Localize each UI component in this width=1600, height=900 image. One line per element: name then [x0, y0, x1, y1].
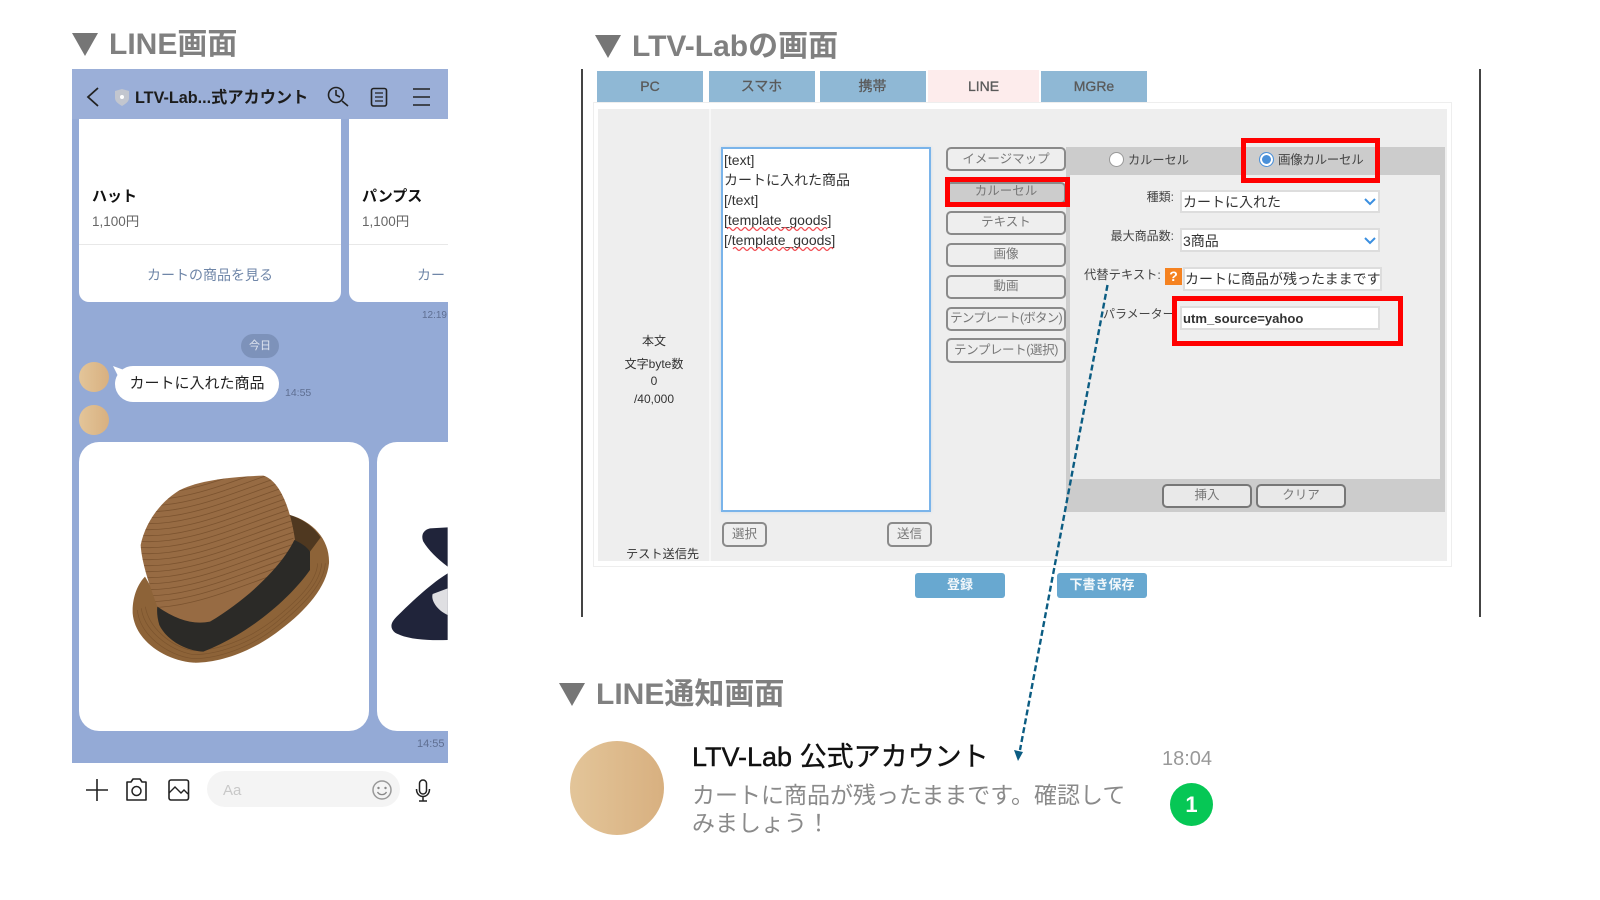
right frame rule — [1479, 69, 1481, 617]
line カートに入れた商品: カートに入れた商品 — [724, 172, 850, 188]
product illustration: hat and shoe — [132, 476, 448, 663]
input 代替テキスト — [1183, 267, 1382, 291]
input パラメーター: utm_source=yahoo — [1183, 311, 1303, 326]
button テキスト: テキスト — [981, 215, 1031, 229]
bubble tail — [113, 366, 122, 375]
input パラメーター — [1180, 306, 1380, 330]
product name: ハット — [92, 188, 137, 205]
radio 画像カルーセル: 画像カルーセル — [1278, 153, 1363, 167]
tab MGRe: MGRe — [1074, 78, 1114, 94]
label 文字byte数: 文字byte数 — [625, 357, 683, 371]
settings inner area — [1070, 175, 1440, 479]
product card: ハット — [79, 119, 341, 302]
icon: orange help: ? — [1169, 268, 1178, 284]
product card: パンプス — [349, 119, 448, 302]
input bar icons — [86, 778, 430, 802]
line [text]: [text] — [724, 152, 754, 168]
tab スマホ — [708, 71, 814, 102]
select 最大商品数 — [1180, 228, 1380, 252]
button 送信 — [887, 522, 932, 547]
tab bar — [597, 70, 1147, 102]
message text area — [721, 147, 931, 512]
select 最大商品数: 3商品 — [1183, 233, 1219, 249]
message bubble: カートに入れた商品 — [129, 375, 264, 392]
avatar 1 — [79, 362, 109, 392]
field label 種類: 種類: — [1147, 190, 1174, 204]
image card: shoe — [377, 442, 448, 731]
panel: LTV-Lab admin screen — [581, 69, 1481, 617]
button 挿入: 挿入 — [1194, 488, 1220, 502]
label 0: 0 — [651, 374, 657, 388]
cart link: カー — [417, 267, 445, 283]
left frame rule — [581, 69, 583, 617]
select 種類: カートに入れた — [1183, 194, 1281, 210]
button 登録 — [915, 573, 1005, 598]
button カルーセル — [946, 182, 1066, 204]
highlight: parameter input — [1172, 296, 1403, 346]
unread badge — [1170, 783, 1213, 826]
message input: Aa — [223, 782, 241, 799]
header icons — [86, 86, 430, 107]
hat crown — [140, 476, 295, 622]
notification time: 18:04 — [1162, 748, 1212, 770]
button 選択: 選択 — [732, 527, 757, 541]
shoe — [391, 527, 448, 640]
input 代替テキスト: カートに商品が残ったままです — [1185, 271, 1381, 287]
heading: LTV-Labの画面: LTV-Labの画面 — [632, 30, 838, 63]
editor panel — [593, 102, 1452, 567]
heading: LINE画面: LINE画面 — [109, 28, 237, 61]
button 動画 — [946, 275, 1066, 299]
button 画像: 画像 — [993, 247, 1018, 261]
product name: パンプス — [362, 188, 422, 205]
select 種類 — [1180, 190, 1380, 213]
label テスト送信先: テスト送信先 — [626, 547, 699, 561]
highlight: カルーセル button — [945, 177, 1070, 207]
button テンプレート(ボタン) — [946, 307, 1066, 331]
phone header bar — [72, 69, 448, 119]
button 下書き保存 — [1057, 573, 1147, 598]
avatar 2 — [79, 405, 109, 435]
product price: 1,100円 — [92, 214, 139, 229]
button 登録: 登録 — [947, 577, 973, 592]
field label 代替テキスト: 代替テキスト: — [1084, 268, 1161, 282]
date pill — [241, 334, 279, 358]
input smiley — [372, 780, 392, 800]
field label 最大商品数: 最大商品数: — [1111, 229, 1174, 243]
heading: LINE通知画面: LINE通知画面 — [596, 678, 784, 711]
label /40,000: /40,000 — [634, 392, 674, 406]
panel: LINE phone screen — [72, 69, 448, 829]
header title: LTV-Lab...式アカウント — [135, 89, 308, 107]
hat brim — [133, 503, 329, 663]
message input — [207, 771, 400, 807]
unread badge: 1 — [1185, 792, 1198, 817]
timestamp 12:19: 12:19 — [422, 310, 447, 321]
button テキスト — [946, 211, 1066, 235]
line [template_goods]: [template_goods] — [724, 212, 831, 228]
button クリア: クリア — [1282, 488, 1320, 502]
notification message — [692, 782, 1125, 836]
button イメージマップ — [946, 147, 1066, 171]
tab 携帯: 携帯 — [858, 78, 886, 94]
tab LINE active: LINE — [968, 78, 999, 94]
button カルーセル: カルーセル — [975, 184, 1037, 198]
tab PC — [597, 71, 703, 102]
button 選択 — [722, 522, 767, 547]
notification title: LTV-Lab 公式アカウント — [692, 742, 989, 772]
product price: 1,100円 — [362, 214, 409, 229]
notification message: みましょう！ — [692, 810, 830, 836]
notification message: カートに商品が残ったままです。確認して — [692, 782, 1125, 808]
timestamp 14:55 bottom: 14:55 — [417, 738, 445, 750]
left field labels — [625, 334, 699, 561]
button テンプレート(選択) — [946, 338, 1066, 363]
button クリア — [1256, 484, 1346, 508]
chat background — [72, 69, 448, 763]
notification avatar — [570, 741, 664, 835]
hat band — [157, 540, 310, 652]
button 動画: 動画 — [993, 279, 1018, 293]
label 本文: 本文 — [642, 334, 666, 348]
icon: orange help — [1165, 268, 1182, 285]
highlight: 画像カルーセル radio — [1241, 138, 1380, 183]
button テンプレート(ボタン): テンプレート(ボタン) — [950, 311, 1062, 325]
tab LINE active — [928, 70, 1039, 102]
date pill: 今日 — [249, 340, 271, 352]
button 下書き保存: 下書き保存 — [1069, 577, 1134, 592]
timestamp 14:55: 14:55 — [285, 387, 311, 399]
button イメージマップ: イメージマップ — [962, 152, 1050, 166]
notification row — [570, 741, 1213, 836]
tab PC: PC — [640, 78, 660, 94]
button 送信: 送信 — [897, 527, 922, 541]
carousel settings panel — [1066, 147, 1445, 512]
button 画像 — [946, 243, 1066, 267]
tab 携帯 — [820, 71, 926, 102]
insert buttons column — [946, 147, 1066, 363]
editor gray background — [598, 109, 1447, 561]
message bubble — [115, 366, 279, 402]
tab MGRe — [1041, 71, 1147, 102]
line [/text]: [/text] — [724, 192, 758, 208]
cart link: カートの商品を見る — [147, 267, 273, 283]
tab スマホ: スマホ — [741, 78, 782, 94]
button 挿入 — [1162, 484, 1252, 508]
line [/template_goods]: [/template_goods] — [724, 232, 835, 248]
button テンプレート(選択): テンプレート(選択) — [954, 343, 1058, 357]
image card: hat — [79, 442, 369, 731]
field label パラメーター: パラメーター — [1103, 307, 1175, 321]
radio カルーセル: カルーセル — [1128, 153, 1189, 167]
